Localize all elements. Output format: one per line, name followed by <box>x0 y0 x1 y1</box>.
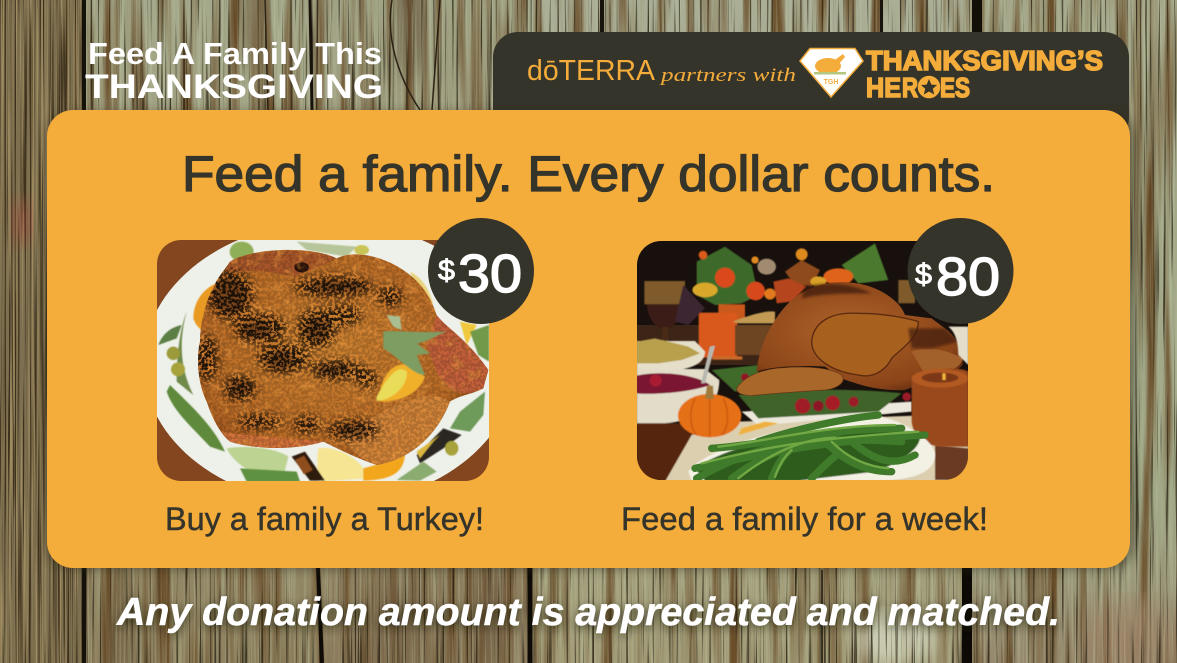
small heading: Feed A Family This Thanksgiving <box>85 36 383 106</box>
small heading: Feed A Family This Thanksgiving: THANKSGIVING <box>85 68 383 106</box>
Thanksgiving's Heroes wordmark: HE <box>866 72 901 103</box>
price badge: $80: $ <box>915 259 932 291</box>
small heading: Feed A Family This Thanksgiving: Feed A Family This <box>88 36 382 71</box>
footer message: Any donation amount is appreciated and matched. <box>116 594 1060 637</box>
headline: Feed a family. Every dollar counts. <box>182 146 995 202</box>
footer message: Any donation amount is appreciated and matched. <box>116 591 1060 634</box>
partners with script: partners with <box>658 65 796 86</box>
doTERRA wordmark: dōTERRA <box>527 55 656 87</box>
panel shadow <box>45 112 1135 570</box>
price badge: $80 <box>908 218 1014 324</box>
caption: buy a turkey: Buy a family a Turkey! <box>165 501 484 537</box>
photo: Thanksgiving table spread <box>635 240 970 482</box>
photo: herb-roasted turkey on a plate <box>157 240 489 481</box>
caption: feed for a week: Feed a family for a week! <box>621 501 988 537</box>
Thanksgiving's Heroes wordmark: ES <box>940 72 970 103</box>
Thanksgiving's Heroes wordmark <box>866 45 1103 103</box>
price badge: $80: 80 <box>936 247 1000 307</box>
icon: TGH diamond turkey <box>800 48 863 97</box>
Thanksgiving's Heroes wordmark: THANKSGIVING’S <box>866 45 1103 76</box>
Thanksgiving's Heroes wordmark: R <box>902 72 918 103</box>
partner logo bar <box>493 32 1129 142</box>
price badge: $30: 30 <box>458 244 522 304</box>
price badge: $30 <box>428 218 534 324</box>
icon: TGH diamond turkey: TGH <box>824 79 838 86</box>
price badge: $30: $ <box>438 255 455 287</box>
main orange panel <box>47 110 1130 568</box>
